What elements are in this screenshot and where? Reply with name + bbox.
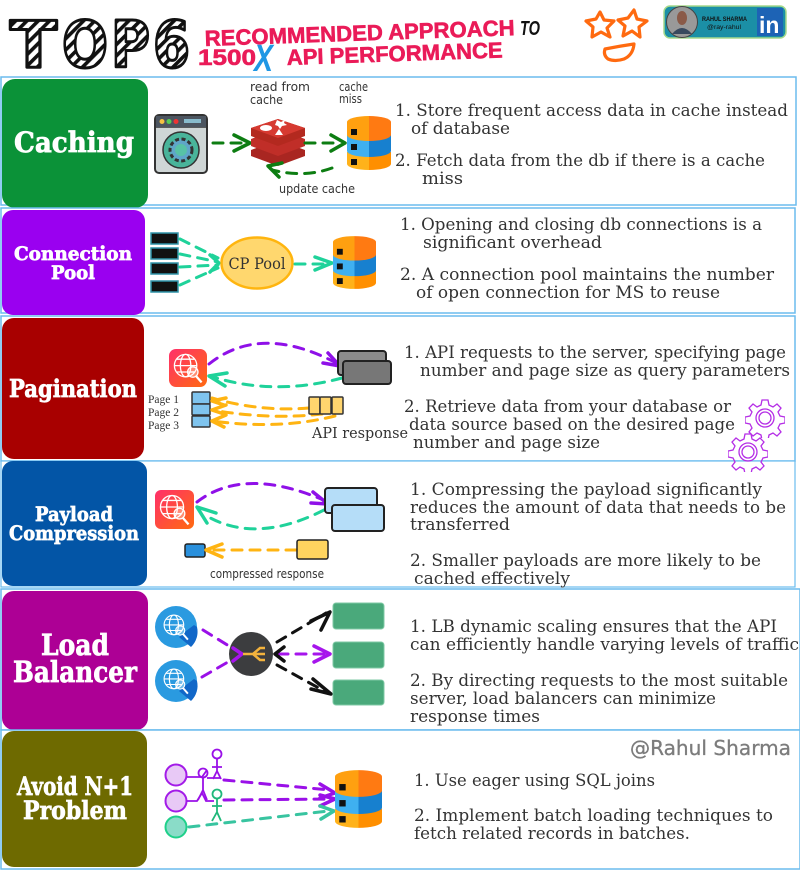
panel: connection pool <box>1 208 795 315</box>
icon: database <box>347 116 391 170</box>
arrow: server one <box>277 612 330 642</box>
arrows: clients to balancer <box>202 630 229 677</box>
heading: avoid n+1: Problem <box>23 796 127 825</box>
text: caching points: 2. Fetch data from the db if there is a cache <box>395 151 765 170</box>
heading: pagination: Pagination <box>9 374 137 403</box>
text: n+1 points: fetch related records in batches. <box>414 824 690 843</box>
subtitle: recommended approach: X <box>253 38 275 80</box>
text: load balancer points: 1. LB dynamic scaling ensures that the API <box>410 617 777 636</box>
text: payload points: transferred <box>410 515 510 534</box>
icon: client one <box>155 606 198 648</box>
text: load balancer points: server, load balancers can minimize <box>410 689 716 708</box>
subtitle: recommended approach: 1500 <box>198 45 256 70</box>
text: caching points: miss <box>422 169 463 188</box>
icon: gears <box>728 400 785 474</box>
heading: load balancer <box>2 591 148 730</box>
text: n+1 points <box>414 771 773 843</box>
labels: pages: Page 1 <box>148 394 179 406</box>
panel: pagination <box>1 316 795 461</box>
text: load balancer points: can efficiently handle varying levels of traffic <box>410 635 799 654</box>
arrow: app to cache <box>213 135 250 151</box>
label: cache miss: cache <box>339 79 368 94</box>
text: pagination points: 1. API requests to the server, specifying page <box>404 343 786 362</box>
subtitle: recommended approach: TO <box>520 18 540 40</box>
shape: CP pool <box>222 238 292 288</box>
icon: payload blocks <box>325 488 384 531</box>
panel: caching: cache <box>250 92 283 107</box>
icon: query nodes <box>166 764 186 838</box>
text: n+1 points: 1. Use eager using SQL joins <box>414 771 655 790</box>
icon: balancer <box>229 632 273 676</box>
arrow: response <box>209 373 342 387</box>
panel: load balancer <box>1 589 800 730</box>
text: connection pool points <box>400 215 774 302</box>
panel: avoid n+1 problem <box>1 730 800 869</box>
text: connection pool points: of open connection for MS to reuse <box>416 283 720 302</box>
heading: payload compression: Payload <box>35 502 113 526</box>
heading: connection pool: Pool <box>51 262 95 284</box>
text: connection pool points: significant overhead <box>423 233 602 252</box>
labels: pages <box>148 394 179 432</box>
title: Top 6 <box>10 9 190 83</box>
labels: pages: Page 3 <box>148 420 179 432</box>
text: payload points: 2. Smaller payloads are more likely to be <box>410 551 761 570</box>
panel: payload compression <box>1 461 795 588</box>
arrow: server three <box>275 647 331 694</box>
arrow: server two <box>278 646 330 662</box>
label: compressed response: compressed response <box>210 566 324 581</box>
arrow: compressed response <box>206 544 296 557</box>
icon: application window <box>155 115 207 173</box>
panel: caching <box>1 77 796 208</box>
arrow: update cache <box>268 163 332 177</box>
panel: caching: miss <box>339 91 362 106</box>
text: payload points: 1. Compressing the payload significantly <box>410 480 763 499</box>
heading: avoid n+1 <box>2 731 147 867</box>
label: API response: API response <box>311 424 408 442</box>
text: pagination points: number and page size as query parameters <box>420 361 790 380</box>
watermark: author: @Rahul Sharma <box>630 736 791 760</box>
arrows: api responses <box>212 398 335 427</box>
icon: compressed block <box>185 544 205 557</box>
title: Top 6: P <box>111 9 150 83</box>
text: caching points <box>395 101 788 188</box>
heading: connection pool: Connection <box>14 243 132 265</box>
arrow: request <box>209 343 340 366</box>
text: n+1 points: 2. Implement batch loading techniques to <box>414 806 773 825</box>
icon: stick figures <box>187 750 222 821</box>
heading: load balancer: Load <box>41 628 109 662</box>
arrow: pool to database <box>295 257 332 270</box>
heading: caching <box>2 79 148 208</box>
text: connection pool points: 2. A connection pool maintains the number <box>400 265 774 284</box>
badge: author <box>664 6 786 38</box>
heading: avoid n+1: Avoid N+1 <box>16 772 133 801</box>
text: load balancer points <box>410 617 799 726</box>
icon: servers <box>333 603 384 705</box>
text: caching points: of database <box>411 119 510 138</box>
shape: CP pool: CP Pool <box>228 254 286 273</box>
icon: connections <box>151 233 178 292</box>
badge: author: RAHUL SHARMA <box>702 16 747 23</box>
text: load balancer points: 2. By directing requests to the most suitable <box>410 671 788 690</box>
text: pagination points: data source based on the desired page <box>409 415 735 434</box>
text: caching points: 1. Store frequent access data in cache instead <box>395 101 788 120</box>
icon: star-eyed face <box>586 10 647 60</box>
title: Top 6: 6 <box>153 9 190 83</box>
heading: load balancer: Balancer <box>13 655 138 689</box>
icon: database <box>333 236 376 289</box>
text: connection pool points: 1. Opening and closing db connections is a <box>400 215 762 234</box>
arrow: request <box>197 484 328 504</box>
heading: caching: Caching <box>14 126 134 159</box>
icon: redis stack <box>251 119 305 166</box>
labels: pages: Page 2 <box>148 407 179 419</box>
subtitle: recommended approach: RECOMMENDED APPROACH <box>204 15 515 51</box>
heading: payload compression: Compression <box>9 521 139 545</box>
text: pagination points <box>404 343 790 452</box>
heading: payload compression <box>2 461 147 586</box>
title: Top 6: T <box>10 9 57 83</box>
subtitle: recommended approach: API PERFORMANCE <box>286 37 503 70</box>
text: load balancer points: response times <box>410 707 540 726</box>
icon: server pages <box>338 351 391 384</box>
title: Top 6: O <box>62 9 108 83</box>
text: payload points: reduces the amount of data that needs to be <box>410 498 786 517</box>
icon: web client <box>169 349 207 387</box>
icon: page stack <box>192 392 210 427</box>
arrows: connections to pool <box>180 239 219 285</box>
text: pagination points: number and page size <box>413 433 600 452</box>
text: payload points <box>410 480 786 588</box>
arrow: response <box>197 507 324 529</box>
badge: author: @ray-rahul <box>707 24 742 31</box>
heading: pagination <box>2 318 144 459</box>
label: update cache: update cache <box>279 181 355 196</box>
icon: response blocks <box>309 397 343 414</box>
heading: connection pool <box>2 210 145 315</box>
icon: web client <box>155 490 194 529</box>
icon: linkedin: in <box>759 12 779 38</box>
text: payload points: cached effectively <box>414 569 571 588</box>
icon: database <box>335 770 382 828</box>
icon: original block <box>297 540 328 559</box>
text: pagination points: 2. Retrieve data from your database or <box>404 397 731 416</box>
arrows: queries to database <box>189 780 335 827</box>
author photo <box>666 6 698 38</box>
subtitle: recommended approach <box>198 15 540 80</box>
label: read from cache: read from <box>250 79 310 94</box>
arrow: cache to database <box>305 135 345 151</box>
icon: client two <box>155 660 198 702</box>
